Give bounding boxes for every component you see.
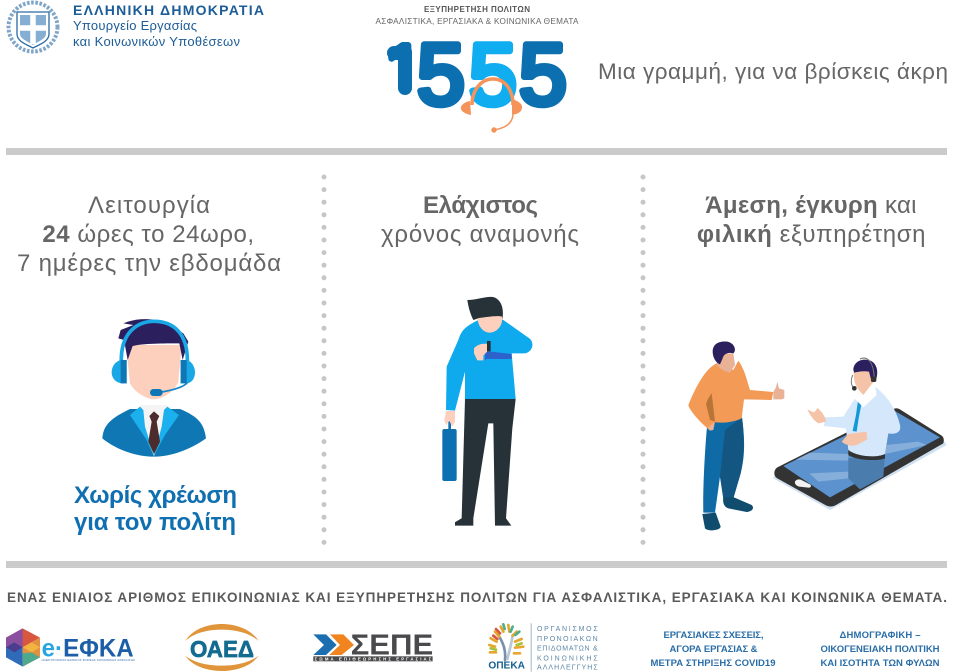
customer in orange sweater (688, 341, 784, 530)
icon: coloured hexagon (6, 628, 40, 667)
logo: SEPE (313, 630, 433, 662)
free of charge note: Χωρίς χρέωση (74, 482, 237, 509)
logo: OPEKA: ΟΡΓΑΝΙΣΜΟΣ (537, 626, 598, 633)
logo: SEPE: ΣΕΠΕ (351, 630, 433, 662)
logo: OPEKA: ΚΟΙΝΩΝΙΚΗΣ (537, 655, 598, 662)
logo: e-EFKA: ΗΛΕΚΤΡΟΝΙΚΟΣ ΕΘΝΙΚΟΣ ΦΟΡΕΑΣ ΚΟΙΝΩΝΙΚΗΣ ΑΣΦΑΛΙΣΗΣ (42, 658, 135, 662)
logo digits (387, 41, 566, 108)
panel: service quality (688, 192, 947, 530)
summary statement: ΕΝΑΣ ΕΝΙΑΙΟΣ ΑΡΙΘΜΟΣ ΕΠΙΚΟΙΝΩΝΙΑΣ ΚΑΙ ΕΞΥΠΗΡΕΤΗΣΗΣ ΠΟΛΙΤΩΝ ΓΙΑ ΑΣΦΑΛΙΣΤΙΚΑ, ΕΡΓΑΣΙΑΚΑ ΚΑΙ ΚΟΙΝΩΝΙΚΑ ΘΕΜΑΤΑ. (7, 590, 947, 605)
panel heading: Άμεση, έγκυρη και (705, 192, 917, 219)
panel: availability (17, 192, 281, 536)
label: demographic policy: ΚΑΙ ΙΣΟΤΗΤΑ ΤΩΝ ΦΥΛΩΝ (820, 658, 940, 669)
logo digits: 1 (385, 31, 423, 107)
free of charge note (74, 482, 237, 536)
icon: orange headset (461, 79, 522, 133)
panel heading: χρόνος αναμονής (381, 221, 579, 248)
logo digits: 5 (519, 27, 567, 123)
logo: e-EFKA (6, 628, 135, 667)
panel heading: Λειτουργία (88, 192, 210, 219)
label: labour relations: ΑΓΟΡΑ ΕΡΓΑΣΙΑΣ & (670, 644, 758, 655)
logo caption: ΕΞΥΠΗΡΕΤΗΣΗ ΠΟΛΙΤΩΝ (424, 5, 530, 14)
logo: OPEKA: ΠΡΟΝΟΙΑΚΩΝ (537, 636, 598, 643)
logo caption: ΑΣΦΑΛΙΣΤΙΚΑ, ΕΡΓΑΣΙΑΚΑ & ΚΟΙΝΩΝΙΚΑ ΘΕΜΑΤΑ (376, 17, 579, 26)
ministry name: ΕΛΛΗΝΙΚΗ ΔΗΜΟΚΡΑΤΙΑ (73, 2, 264, 18)
free of charge note: για τον πολίτη (74, 509, 236, 536)
logo: SEPE: ΣΩΜΑ ΕΠΙΘΕΩΡΗΣΗΣ ΕΡΓΑΣΙΑΣ (315, 657, 432, 662)
label: demographic policy: ΔΗΜΟΓΡΑΦΙΚΗ – (840, 630, 920, 641)
label: demographic policy (820, 630, 940, 669)
agent in phone (807, 358, 900, 460)
panel heading: 7 ημέρες την εβδομάδα (17, 250, 281, 277)
logo: OPEKA (488, 623, 598, 672)
header: ministry logo (8, 2, 264, 52)
panel heading: φιλική εξυπηρέτηση (697, 221, 926, 248)
logo digits: 5 (417, 27, 465, 123)
label: labour relations: ΜΕΤΡΑ ΣΤΗΡΙΞΗΣ COVID19 (650, 658, 776, 669)
logo: OAED (185, 624, 259, 671)
icon: customer and agent on smartphone (688, 341, 947, 530)
panel heading: 24 ώρες το 24ωρο, (42, 221, 255, 248)
panel heading (381, 192, 579, 248)
panel: waiting time (381, 192, 579, 526)
icon: man checking watch with briefcase (442, 297, 532, 526)
logo: OPEKA: ΟΠΕΚΑ (488, 660, 525, 671)
header: 1555 logo (376, 5, 579, 133)
icon: greek crest (8, 2, 58, 52)
label: labour relations (650, 630, 776, 669)
ministry name: Υπουργείο Εργασίας (73, 18, 197, 33)
logo: OPEKA: ΑΛΛΗΛΕΓΓΥΗΣ (537, 665, 598, 672)
logo: OPEKA: ΕΠΙΔΟΜΑΤΩΝ & (537, 646, 598, 653)
logo: OAED: ΟΑΕΔ (190, 636, 254, 662)
logo caption (376, 5, 579, 26)
panel heading (697, 192, 926, 248)
icon: tree of dots (489, 624, 523, 660)
panel heading: Ελάχιστος (423, 192, 538, 219)
top divider (6, 148, 947, 155)
bottom divider (6, 561, 947, 568)
label: labour relations: ΕΡΓΑΣΙΑΚΕΣ ΣΧΕΣΕΙΣ, (664, 630, 764, 641)
tagline: Μια γραμμή, για να βρίσκεις άκρη (598, 59, 948, 84)
logo digits: 5 (469, 27, 517, 123)
label: demographic policy: ΟΙΚΟΓΕΝΕΙΑΚΗ ΠΟΛΙΤΙΚΗ (820, 644, 940, 655)
ministry name (73, 2, 264, 49)
logo: e-EFKA: e·ΕΦΚΑ (42, 634, 134, 662)
icon: call agent with headset (102, 319, 206, 457)
ministry name: και Κοινωνικών Υποθέσεων (73, 34, 240, 49)
phone (773, 408, 947, 510)
panel heading (17, 192, 281, 277)
